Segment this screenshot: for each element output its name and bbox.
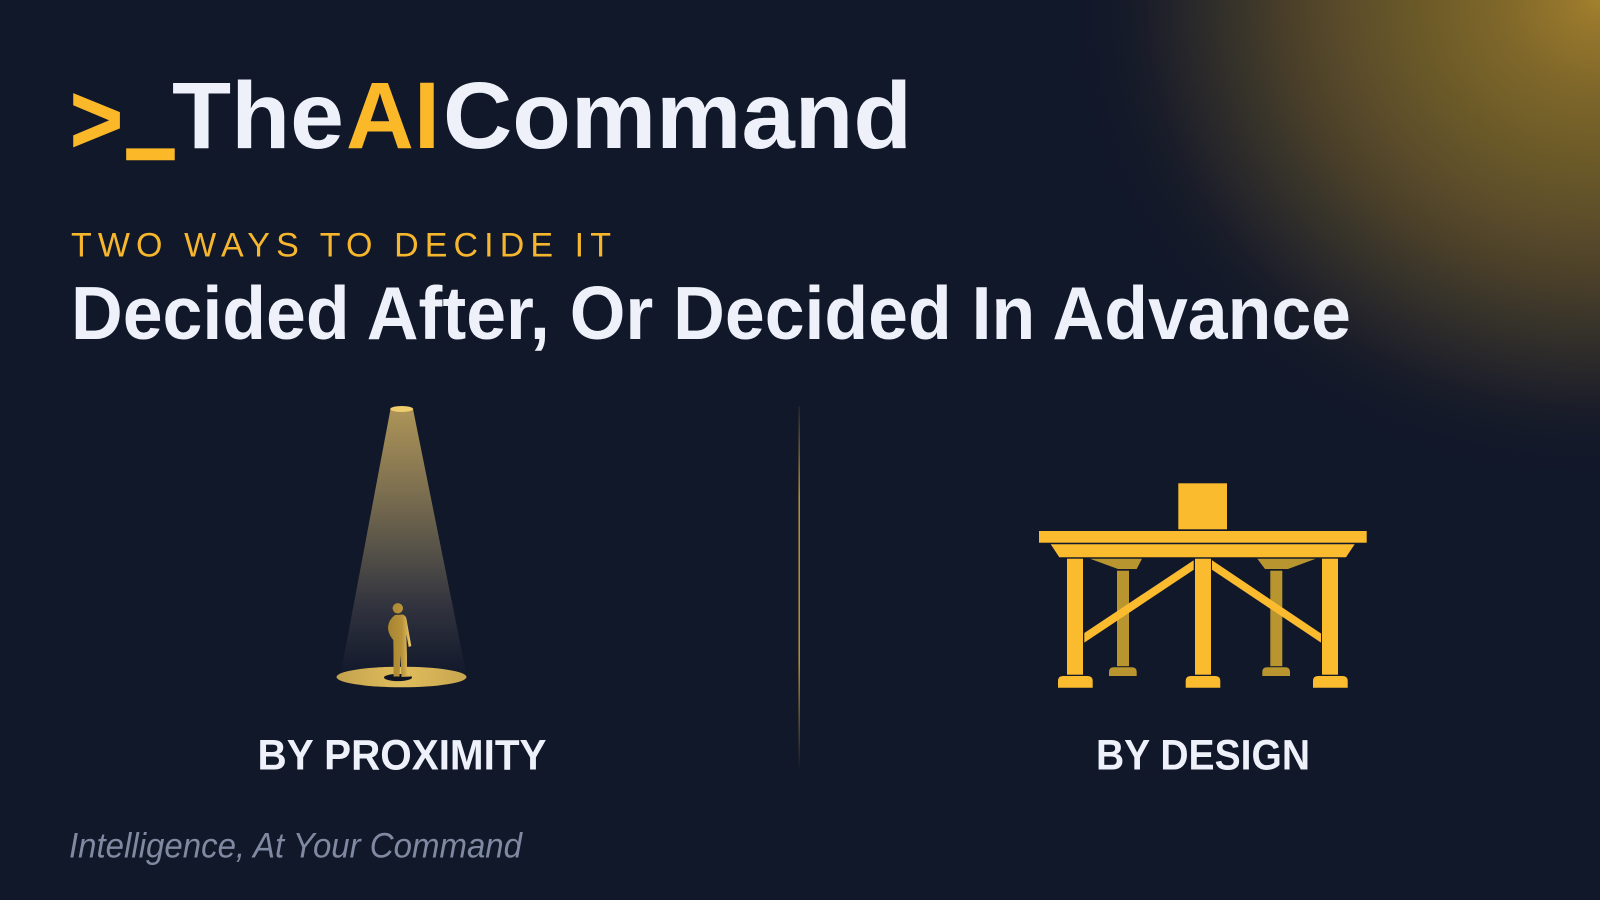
label: by proximity: BY PROXIMITY	[258, 732, 546, 780]
logo	[70, 0, 912, 189]
icon: engineered table with box	[1039, 483, 1367, 688]
box on top	[1178, 483, 1227, 529]
tagline: Intelligence, At Your Command	[69, 826, 523, 866]
lamp opening	[390, 406, 413, 412]
logo prompt symbol: >	[70, 64, 123, 173]
braces	[1084, 560, 1194, 643]
beam	[1051, 544, 1355, 557]
pool of light	[336, 667, 466, 687]
label: by design: BY DESIGN	[1096, 732, 1310, 780]
back supports	[1090, 559, 1316, 676]
logo word: AI: AI	[346, 63, 440, 169]
person	[388, 603, 411, 677]
logo word: The: The	[172, 63, 344, 169]
person shadow	[384, 674, 412, 681]
divider	[798, 406, 800, 770]
columns	[1067, 559, 1083, 675]
logo prompt symbol	[70, 0, 176, 189]
feet	[1058, 676, 1093, 688]
logo word: Command: Command	[443, 63, 912, 169]
front structure	[1039, 483, 1367, 688]
eyebrow: TWO WAYS TO DECIDE IT	[71, 226, 611, 264]
tabletop	[1039, 531, 1367, 543]
corner glow	[1050, 0, 1600, 500]
light cone	[341, 409, 466, 672]
icon: spotlight on a person	[336, 406, 466, 687]
headline: Decided After, Or Decided In Advance	[71, 271, 1351, 355]
